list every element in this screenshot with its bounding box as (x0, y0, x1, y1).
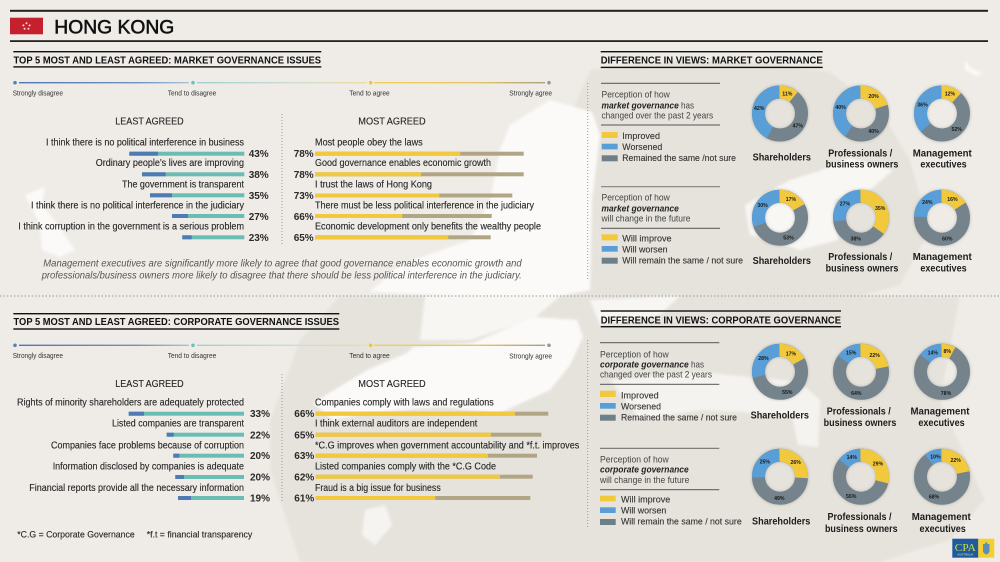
chart: market least agreed: The government is transparent (122, 178, 244, 190)
donut: shareholders corporate past (751, 350, 809, 422)
chart: market least agreed: I think corruption in the government is a serious problem (18, 220, 244, 232)
donut: management market past (913, 92, 972, 171)
agreement scale (13, 344, 552, 360)
heading: corporate views: DIFFERENCE IN VIEWS: CORPORATE GOVERNANCE (601, 314, 841, 326)
chart: market least agreed: Ordinary people's lives are improving (96, 157, 244, 169)
chart: corporate most agreed (294, 378, 579, 504)
donut: professionals market past: Professionals / (828, 148, 892, 160)
donut: professionals market future (826, 196, 898, 275)
donut: shareholders corporate future: Shareholders (752, 516, 810, 528)
agreement scale: Tend to disagree (168, 90, 216, 97)
logo: CPA Australia: AUSTRALIA (957, 552, 973, 556)
donut: shareholders corporate past: 55% (782, 390, 793, 396)
chart: corporate least agreed: Listed companies are transparent (112, 418, 244, 430)
legend: market past: market governance (602, 100, 679, 111)
chart: market most agreed: 73% (294, 191, 314, 202)
logo: CPA Australia (952, 539, 994, 558)
donut: management corporate future: 22% (951, 458, 961, 464)
donut: shareholders market past (753, 91, 811, 164)
chart: market least agreed: 38% (249, 170, 269, 181)
heading: market views: DIFFERENCE IN VIEWS: MARKET GOVERNANCE (601, 55, 823, 67)
legend: market past: Worsened (622, 142, 662, 153)
donut: shareholders market future: Shareholders (753, 255, 811, 267)
chart: corporate most agreed: Companies comply with laws and regulations (315, 396, 494, 408)
donut: professionals market future: 38% (851, 236, 861, 242)
donut: shareholders corporate past: 17% (786, 351, 796, 357)
donut: management market future (913, 196, 972, 275)
donut: professionals market future: business owners (826, 263, 898, 275)
donut: management corporate future: 68% (929, 495, 940, 501)
chart: market least agreed: LEAST AGREED (115, 115, 184, 127)
chart: corporate most agreed: 62% (294, 472, 314, 483)
donut: professionals market past: 40% (835, 105, 846, 111)
chart: market most agreed: I trust the laws of Hong Kong (315, 179, 432, 191)
icon: Hong Kong flag (10, 18, 43, 34)
legend: corporate future: Will worsen (621, 506, 666, 517)
legend: market past: Remained the same /not sure (622, 153, 736, 164)
donut: shareholders corporate future: 25% (760, 460, 770, 466)
note: market governance finding: Management executives are significantly more likely to agree that good governance enables economic growth and (43, 259, 522, 270)
donut: professionals market past: 40% (868, 129, 879, 135)
chart: market most agreed: 78% (294, 170, 314, 181)
chart: market most agreed: 65% (294, 233, 314, 244)
donut: management market future: 16% (947, 197, 958, 203)
legend: market future: will change in the future (601, 214, 690, 225)
chart: corporate least agreed: Information disclosed by companies is adequate (53, 461, 244, 473)
donut: management corporate future: 10% (930, 454, 941, 460)
legend: market past: Perception of how (602, 90, 670, 101)
legend: market future: Will remain the same / not sure (622, 255, 743, 266)
chart: corporate most agreed: *C.G improves when government accountability and *f.t. improves (315, 439, 579, 451)
legend: corporate future: corporate governance (600, 465, 689, 476)
legend: corporate past: corporate governance (600, 360, 689, 371)
legend: corporate past (600, 342, 737, 424)
chart: corporate least agreed: 22% (250, 430, 270, 441)
chart: market least agreed: 27% (249, 212, 269, 223)
donut: professionals corporate past (824, 350, 896, 429)
legend: corporate past: changed over the past 2 years (600, 370, 712, 381)
chart: corporate least agreed: 19% (250, 493, 270, 504)
donut: management market past: executives (920, 159, 967, 171)
footnote: *C.G = Corporate Governance (17, 529, 135, 540)
donut: shareholders market past: Shareholders (753, 152, 811, 164)
agreement scale: Tend to agree (349, 353, 390, 360)
agreement scale (13, 81, 552, 97)
donut: professionals corporate past: Professionals / (827, 405, 891, 417)
donut: shareholders corporate past: Shareholders (751, 410, 809, 422)
page header (10, 10, 988, 42)
donut: professionals market future: 35% (875, 206, 886, 212)
legend: corporate future: will change in the future (599, 475, 689, 486)
chart: market most agreed: MOST AGREED (358, 115, 426, 127)
donut: shareholders corporate past: 28% (758, 356, 769, 362)
panel: corporate difference in views (599, 310, 971, 535)
donut: management market past: 52% (952, 127, 962, 133)
donut: professionals corporate future: 29% (873, 462, 884, 468)
donut: management market past: 36% (917, 102, 928, 108)
chart: market least agreed: 35% (249, 191, 269, 202)
donut: management corporate past: executives (918, 417, 965, 429)
donut: management market future: 24% (922, 200, 933, 206)
donut: professionals corporate future: business owners (825, 523, 898, 535)
chart: corporate most agreed: I think external auditors are independent (315, 418, 477, 430)
legend: market past: has (681, 100, 694, 111)
chart: corporate least agreed: Financial reports provide all the necessary information (29, 482, 244, 494)
legend: corporate future: Perception of how (600, 455, 669, 466)
chart: corporate most agreed: 66% (294, 409, 314, 420)
chart: market most agreed: 78% (294, 149, 314, 160)
donut: shareholders corporate future (752, 455, 810, 528)
legend: corporate past: has (691, 360, 704, 371)
chart: corporate least agreed (17, 378, 270, 504)
chart: corporate least agreed: Rights of minority shareholders are adequately protected (17, 396, 244, 408)
chart: corporate least agreed: Companies face problems because of corruption (51, 439, 244, 451)
donut: professionals market past: 20% (868, 94, 879, 100)
chart: corporate most agreed: Fraud is a big issue for business (315, 482, 441, 494)
legend: market future: market governance (602, 204, 679, 215)
donut: management market future: Management (913, 251, 972, 263)
donut: professionals corporate future (825, 455, 898, 535)
donut: management corporate future: executives (920, 523, 966, 535)
chart: corporate most agreed: 63% (294, 451, 314, 462)
donut: professionals market future: Professionals / (828, 251, 892, 263)
donut: professionals market past (826, 92, 898, 171)
donut: professionals corporate future: Professionals / (828, 511, 892, 523)
legend: market past: changed over the past 2 years (602, 111, 713, 122)
legend: market past (601, 83, 736, 164)
donut: shareholders market past: 47% (793, 124, 803, 130)
chart: market least agreed: I think there is no political interference in the judiciary (31, 199, 245, 211)
chart: corporate least agreed: 20% (250, 472, 270, 483)
legend: corporate past: Worsened (621, 401, 661, 412)
title: HONG KONG (54, 17, 174, 38)
donut: shareholders corporate future: 26% (791, 460, 801, 466)
agreement scale: Tend to agree (349, 90, 390, 97)
donut: professionals market past: business owners (826, 159, 898, 171)
panel: corporate governance issues (13, 313, 579, 540)
agreement scale: Tend to disagree (168, 353, 216, 360)
donut: management corporate future (912, 454, 971, 535)
donut: management corporate past: 78% (941, 391, 952, 397)
note: market governance finding: professionals/business owners more likely to disagree that there should be less political interference in the judiciary. (41, 271, 522, 282)
chart: market most agreed (294, 115, 541, 244)
chart: market most agreed: Good governance enables economic growth (315, 157, 491, 169)
chart: corporate least agreed: LEAST AGREED (115, 378, 184, 390)
donut: professionals corporate past: 64% (851, 391, 862, 397)
donut: management corporate past: 8% (944, 349, 951, 355)
donut: management corporate past: 14% (928, 350, 938, 356)
footnote: *f.t = financial transparency (147, 529, 253, 540)
note: market governance finding (41, 259, 522, 282)
chart: market least agreed: I think there is no political interference in business (46, 136, 244, 148)
legend: market past: Improved (622, 131, 660, 142)
chart: corporate most agreed: 65% (294, 430, 314, 441)
agreement scale: Strongly disagree (13, 353, 63, 360)
chart: corporate most agreed: Listed companies comply with the *C.G Code (315, 461, 496, 473)
donut: shareholders market future: 17% (786, 197, 796, 203)
donut: shareholders market past: 11% (782, 91, 793, 97)
chart: market most agreed: There must be less political interference in the judiciary (315, 199, 535, 211)
logo: CPA Australia: CPA (955, 542, 976, 554)
donut: shareholders market future: 30% (757, 203, 768, 209)
donut: professionals corporate past: business owners (824, 417, 896, 429)
donut: professionals corporate past: 22% (870, 353, 880, 359)
panel: market governance issues (13, 51, 552, 282)
legend: market future: Perception of how (602, 193, 670, 204)
chart: market most agreed: Economic development only benefits the wealthy people (315, 220, 541, 232)
chart: market most agreed: 66% (294, 212, 314, 223)
legend: corporate past: Remained the same / not sure (621, 413, 737, 424)
donut: management market past: Management (913, 148, 972, 160)
chart: market least agreed (18, 115, 269, 244)
chart: market least agreed: 23% (249, 233, 269, 244)
heading: corporate issues: TOP 5 MOST AND LEAST AGREED: CORPORATE GOVERNANCE ISSUES (14, 316, 339, 328)
donut: shareholders market past: 42% (754, 106, 765, 112)
legend: market future: Will improve (622, 233, 672, 244)
donut: professionals corporate future: 55% (846, 494, 857, 500)
donut: professionals corporate future: 14% (847, 455, 857, 461)
footnote (17, 529, 253, 540)
chart: corporate most agreed: 61% (294, 493, 314, 504)
chart: corporate least agreed: 20% (250, 451, 270, 462)
legend: corporate past: Perception of how (600, 349, 669, 360)
legend: corporate future: Will improve (621, 495, 670, 506)
agreement scale: Strongly agree (509, 354, 552, 360)
agreement scale: Strongly agree (509, 90, 552, 97)
donut: management corporate future: Management (912, 511, 971, 523)
panel: market difference in views (601, 51, 972, 275)
heading: market issues: TOP 5 MOST AND LEAST AGREED: MARKET GOVERNANCE ISSUES (14, 54, 321, 66)
legend: corporate future: Will remain the same / not sure (621, 517, 742, 528)
legend: market future: Will worsen (622, 244, 668, 255)
donut: management corporate past (910, 349, 970, 429)
chart: corporate most agreed: MOST AGREED (358, 378, 426, 390)
donut: management market future: 60% (942, 236, 953, 242)
chart: market most agreed: Most people obey the laws (315, 136, 423, 148)
chart: corporate least agreed: 33% (250, 409, 270, 420)
donut: professionals market future: 27% (840, 202, 850, 208)
donut: management market past: 12% (945, 92, 955, 98)
donut: shareholders market future (753, 196, 811, 267)
legend: corporate past: Improved (621, 391, 659, 402)
chart: market least agreed: 43% (249, 149, 269, 160)
agreement scale: Strongly disagree (13, 90, 63, 97)
donut: shareholders market future: 53% (783, 235, 794, 241)
legend: market future (601, 186, 743, 266)
donut: management market future: executives (920, 263, 967, 275)
donut: shareholders corporate future: 49% (774, 496, 785, 502)
legend: corporate future (599, 448, 742, 528)
donut: professionals corporate past: 15% (846, 351, 857, 357)
donut: management corporate past: Management (910, 405, 970, 417)
